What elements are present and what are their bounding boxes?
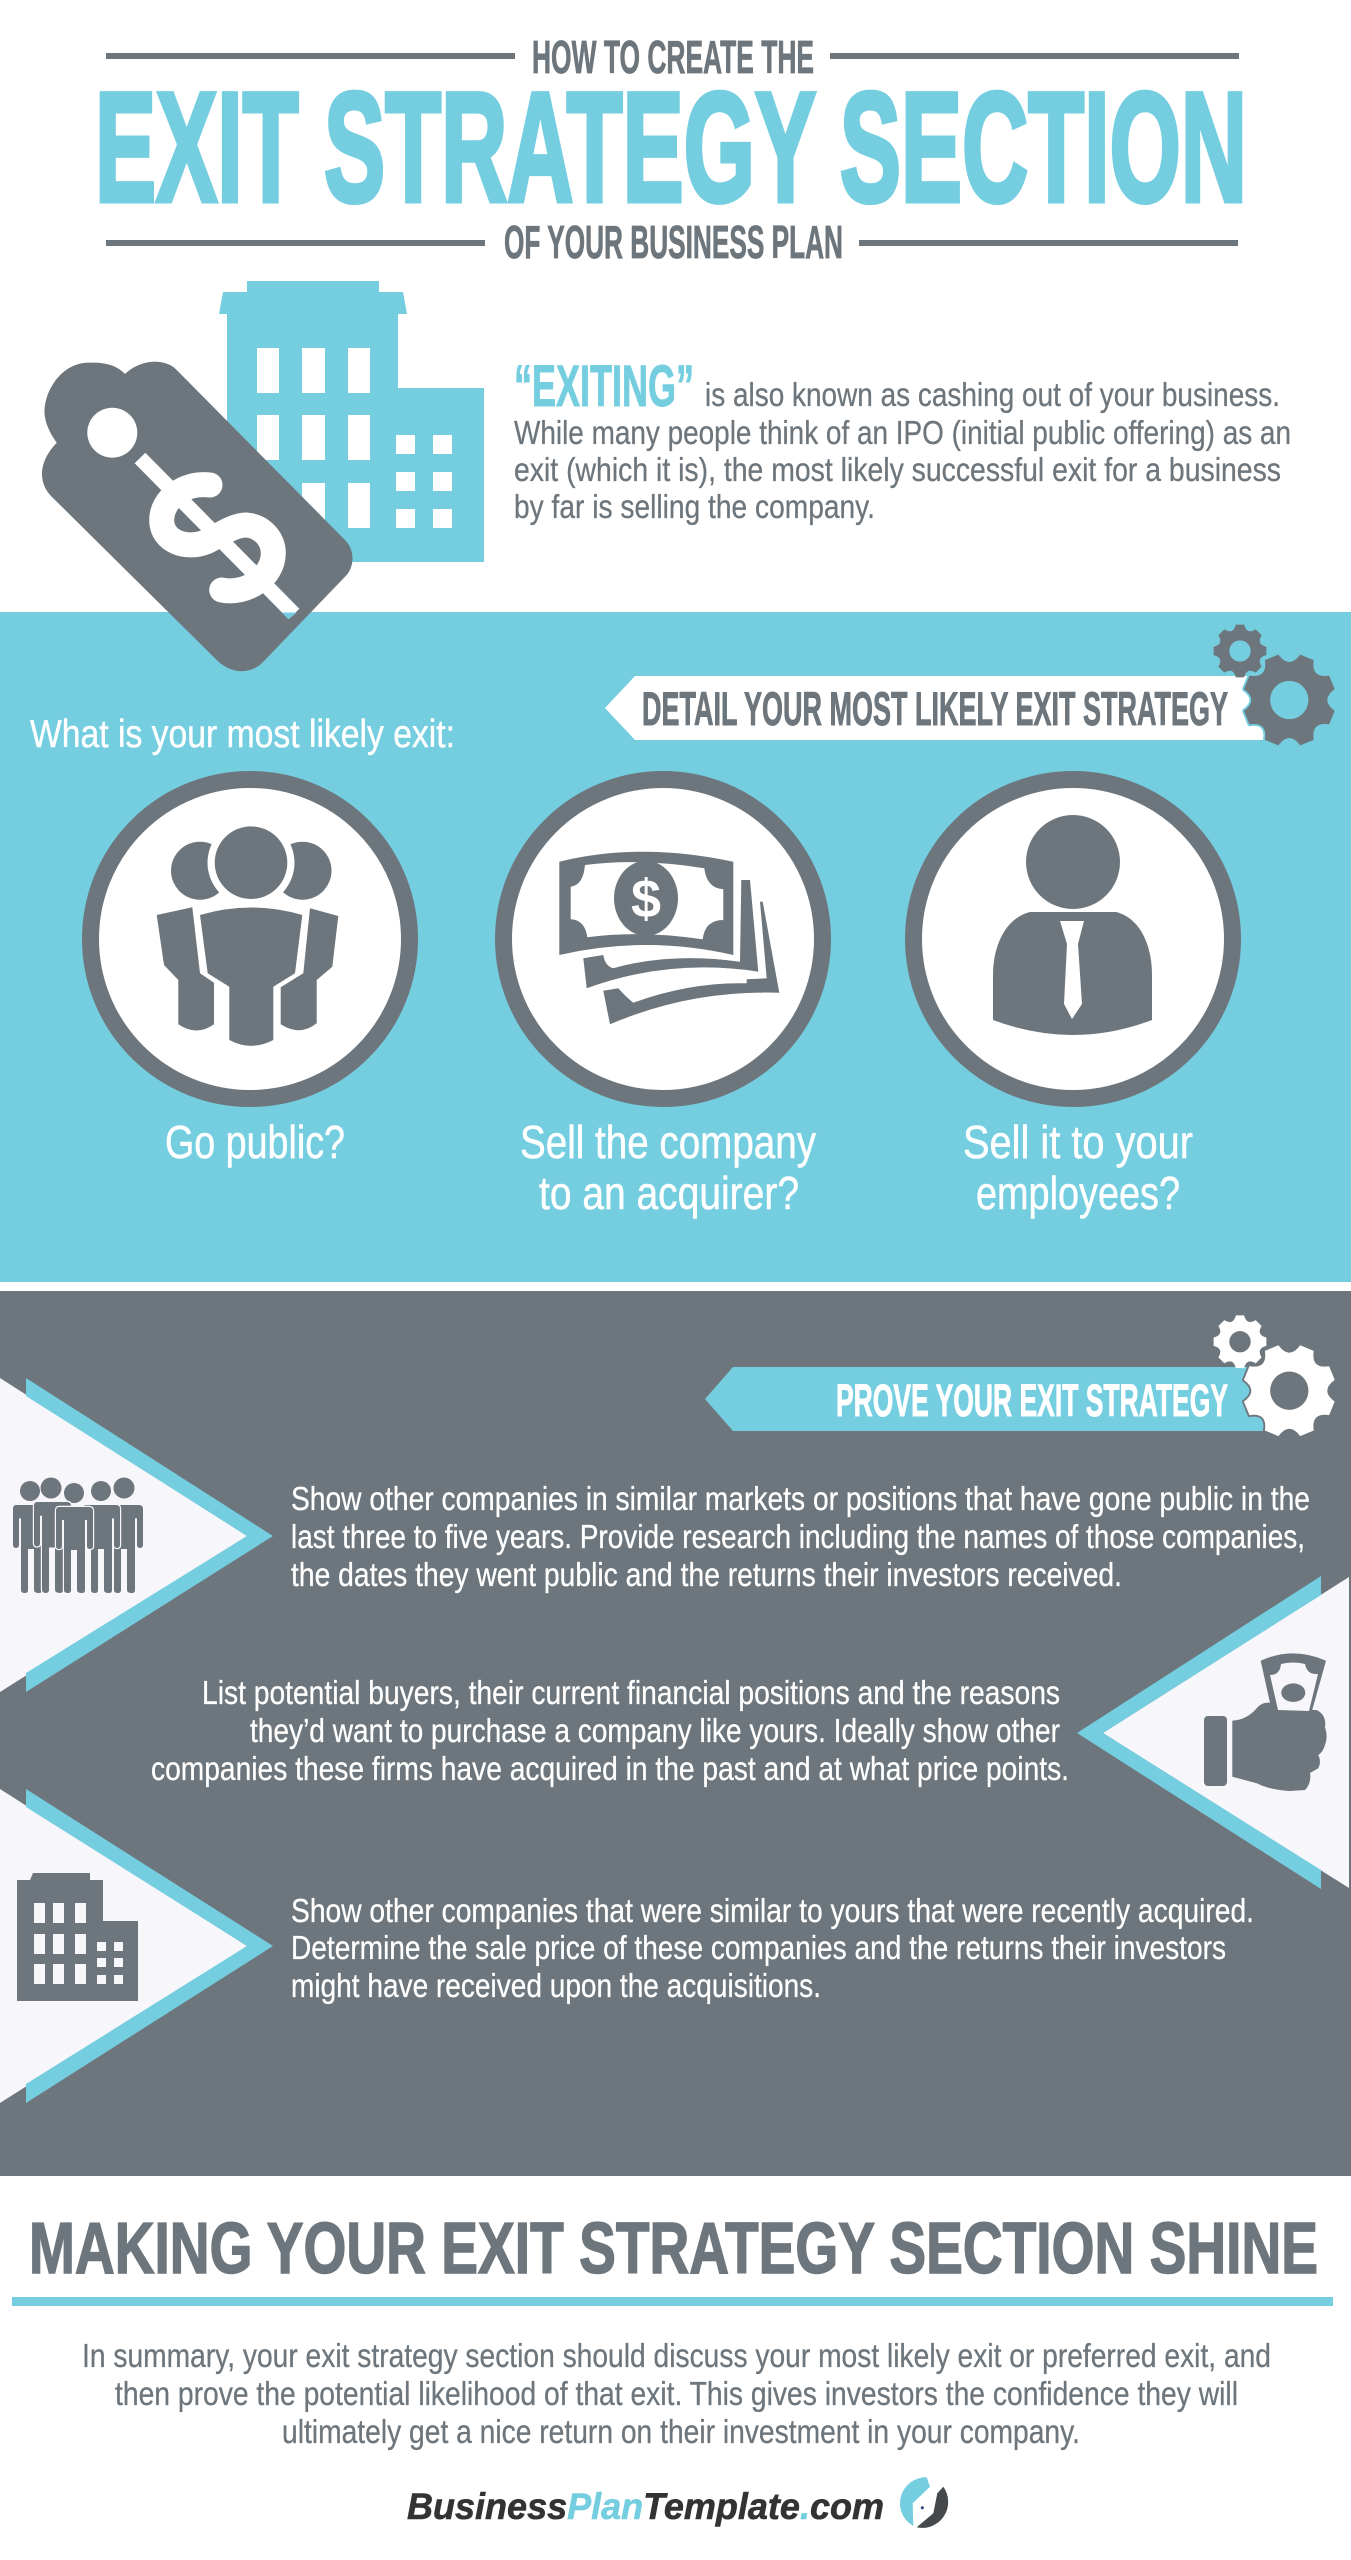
proof item: recently acquired companies bbox=[0, 1789, 1254, 2103]
icon: office building bbox=[219, 281, 484, 562]
panel: detail your most likely exit strategy bbox=[0, 612, 1351, 1282]
title block: HOW TO CREATE THE bbox=[532, 31, 814, 83]
label: sell it to your employees: employees? bbox=[976, 1167, 1180, 1219]
icon: hand holding money bbox=[1204, 1653, 1327, 1791]
logo: business plan template: BusinessPlanTemplate.com bbox=[407, 2486, 884, 2527]
proof item: companies gone public bbox=[0, 1378, 1310, 1692]
icon: stack of money: $ bbox=[631, 869, 661, 929]
icon: group of people bbox=[157, 819, 338, 1046]
rule under heading bbox=[12, 2297, 1333, 2306]
text: potential buyers bbox=[151, 1674, 1069, 1787]
icon: price tag with dollar sign bbox=[42, 362, 353, 671]
intro text bbox=[514, 354, 1291, 525]
banner: prove your exit strategy bbox=[705, 1367, 1265, 1431]
summary text: ultimately get a nice return on their investment in your company. bbox=[282, 2413, 1080, 2450]
label: sell the company to an acquirer bbox=[520, 1116, 816, 1219]
label: go public: Go public? bbox=[165, 1116, 345, 1168]
icon: person with tie bbox=[993, 815, 1152, 1035]
icon: gears bbox=[1206, 1308, 1335, 1436]
icon: gears bbox=[1206, 617, 1335, 745]
title block bbox=[95, 31, 1247, 268]
text: recently acquired companies bbox=[291, 1892, 1254, 2004]
summary text bbox=[82, 2337, 1271, 2450]
intro text: “EXITING” bbox=[514, 354, 694, 419]
label: sell the company to an acquirer: Sell the company bbox=[520, 1116, 816, 1168]
title block: OF YOUR BUSINESS PLAN bbox=[504, 216, 843, 268]
icon: stack of money bbox=[559, 852, 779, 1024]
proof item: potential buyers bbox=[151, 1576, 1349, 1889]
label: sell the company to an acquirer: to an acquirer? bbox=[539, 1167, 799, 1219]
label: sell it to your employees bbox=[963, 1116, 1193, 1219]
icon: office building bbox=[17, 1873, 138, 2001]
icon: pen nib circle bbox=[900, 2477, 948, 2528]
text: potential buyers: List potential buyers, their current financial positions and the reasons bbox=[202, 1674, 1060, 1711]
label: sell it to your employees: Sell it to your bbox=[963, 1116, 1193, 1168]
option: sell to an acquirer bbox=[504, 780, 822, 1219]
text: recently acquired companies: might have received upon the acquisitions. bbox=[291, 1967, 821, 2004]
text: companies gone public: the dates they went public and the returns their investors received. bbox=[291, 1556, 1122, 1593]
intro text: by far is selling the company. bbox=[514, 488, 875, 525]
question: what is your most likely exit: What is your most likely exit: bbox=[30, 713, 455, 756]
icon: crowd of people bbox=[13, 1478, 143, 1593]
panel: prove your exit strategy bbox=[0, 1291, 1351, 2176]
option: sell to employees bbox=[914, 780, 1232, 1219]
text: potential buyers: companies these firms have acquired in the past and at what price points. bbox=[151, 1750, 1069, 1787]
option: go public bbox=[90, 780, 410, 1168]
text: potential buyers: they’d want to purchase a company like yours. Ideally show other bbox=[250, 1712, 1060, 1749]
text: companies gone public bbox=[291, 1480, 1310, 1593]
